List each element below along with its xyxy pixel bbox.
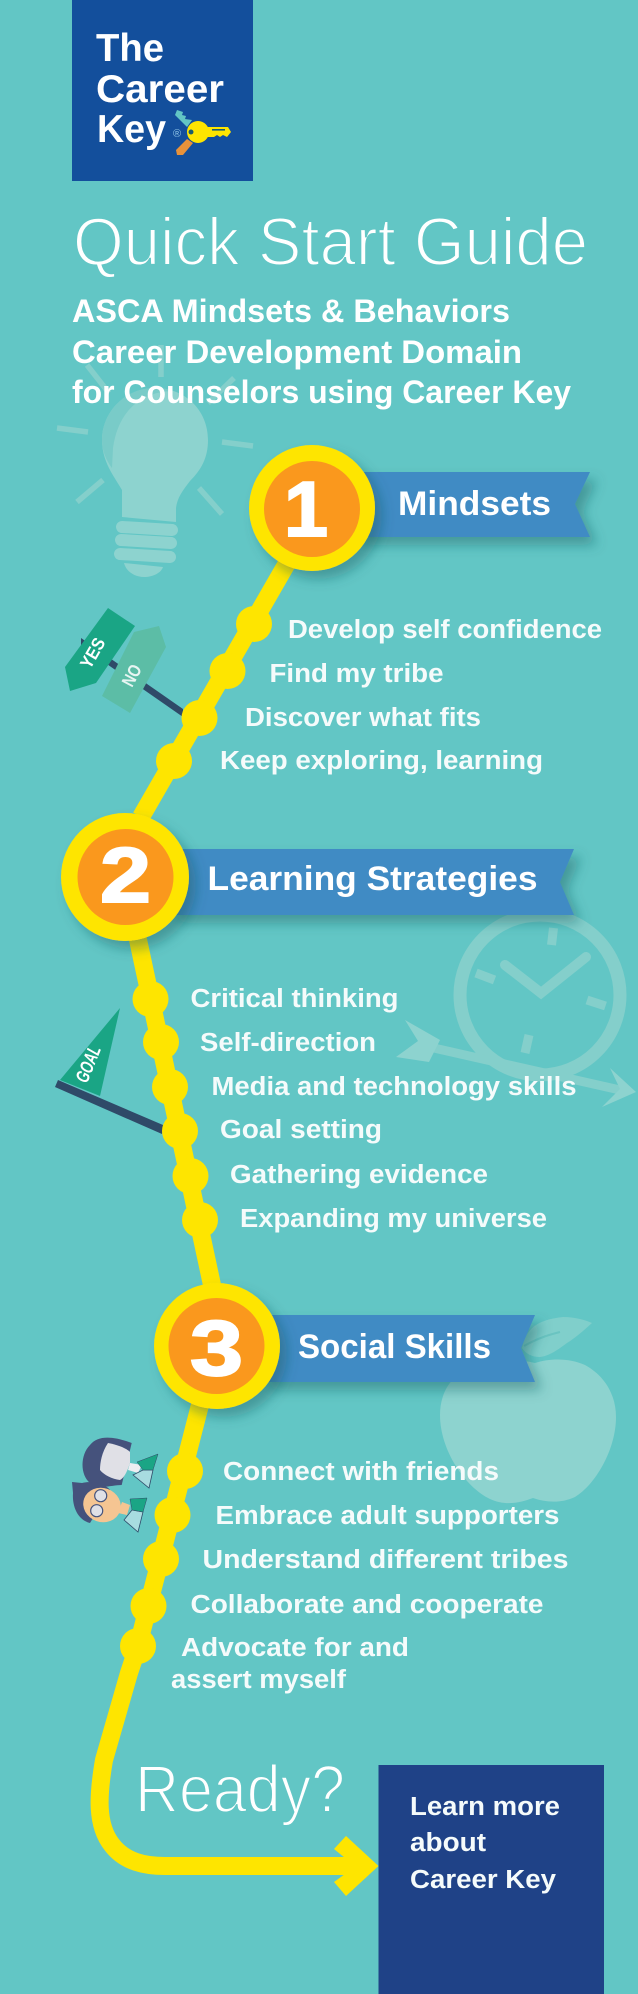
section 1 banner: Mindsets <box>355 472 590 537</box>
section 2 banner: Learning Strategies <box>170 849 574 915</box>
section 2 list: Goal setting <box>220 1116 382 1144</box>
path dots <box>120 606 272 1664</box>
call to action box: about <box>410 1829 487 1857</box>
icon: goal flag <box>55 1008 163 1134</box>
subtitle: ASCA Mindsets & Behaviors <box>72 293 510 329</box>
icon: apple <box>440 1317 616 1503</box>
section 2 list: Media and technology skills <box>212 1073 576 1101</box>
heading: Ready?: Ready? <box>135 1752 345 1827</box>
section 3 banner: Social Skills <box>262 1315 535 1382</box>
subtitle: for Counselors using Career Key <box>72 374 571 410</box>
section 3 list: Collaborate and cooperate <box>190 1591 544 1619</box>
section 2 list: Expanding my universe <box>240 1205 547 1233</box>
section 1 list: Discover what fits <box>245 704 481 732</box>
section 2 list: Critical thinking <box>190 985 398 1013</box>
logo: The Career Key: Career <box>96 68 224 111</box>
logo: The Career Key: ® <box>173 128 181 140</box>
icon: two people <box>72 1438 158 1532</box>
call to action box <box>378 1765 604 1994</box>
section 1 list: Keep exploring, learning <box>220 747 543 775</box>
section 3 list: Connect with friends <box>223 1458 499 1486</box>
section 1 number badge: 1 <box>284 465 328 553</box>
section 3 list: Advocate for and <box>181 1634 409 1662</box>
section 2 list <box>190 985 576 1233</box>
section 1 list: Find my tribe <box>270 660 444 688</box>
section 2 number badge <box>61 813 189 941</box>
section 3 banner: Social Skills: Social Skills <box>298 1328 491 1366</box>
section 3 list: Understand different tribes <box>202 1546 568 1574</box>
section 3 list <box>171 1458 568 1694</box>
icon: light bulb <box>57 345 253 577</box>
section 2 list: Self-direction <box>200 1029 376 1057</box>
call to action box: Career Key <box>410 1866 557 1894</box>
logo: The Career Key: Key <box>97 108 166 151</box>
icon: yes no signpost <box>65 608 183 717</box>
title: Quick Start Guide: Quick Start Guide <box>73 204 588 280</box>
section 2 banner: Learning Strategies: Learning Strategies <box>208 860 538 898</box>
section 1 list: Develop self confidence <box>288 616 602 644</box>
call to action box: Learn more <box>410 1793 560 1821</box>
logo: The Career Key <box>72 0 253 181</box>
icon: yes no signpost: NO <box>118 661 146 690</box>
subtitle <box>72 293 571 410</box>
section 2 list: Gathering evidence <box>230 1161 488 1189</box>
section 1 number badge <box>249 445 375 571</box>
icon: yes no signpost: YES <box>76 634 109 672</box>
section 3 list: assert myself <box>171 1666 347 1694</box>
subtitle: Career Development Domain <box>72 334 522 370</box>
section 3 list: Embrace adult supporters <box>216 1502 560 1530</box>
section 3 number badge: 3 <box>190 1304 243 1392</box>
section 2 number badge: 2 <box>100 831 151 919</box>
section 3 number badge <box>154 1283 280 1409</box>
section 1 list <box>220 616 602 775</box>
arrowhead <box>334 1836 378 1896</box>
logo: The Career Key: The <box>96 27 164 70</box>
section 1 banner: Mindsets: Mindsets <box>398 485 551 523</box>
icon: clock with arrow <box>396 915 636 1107</box>
icon: goal flag: GOAL <box>72 1043 106 1086</box>
yellow path line <box>100 558 345 1866</box>
